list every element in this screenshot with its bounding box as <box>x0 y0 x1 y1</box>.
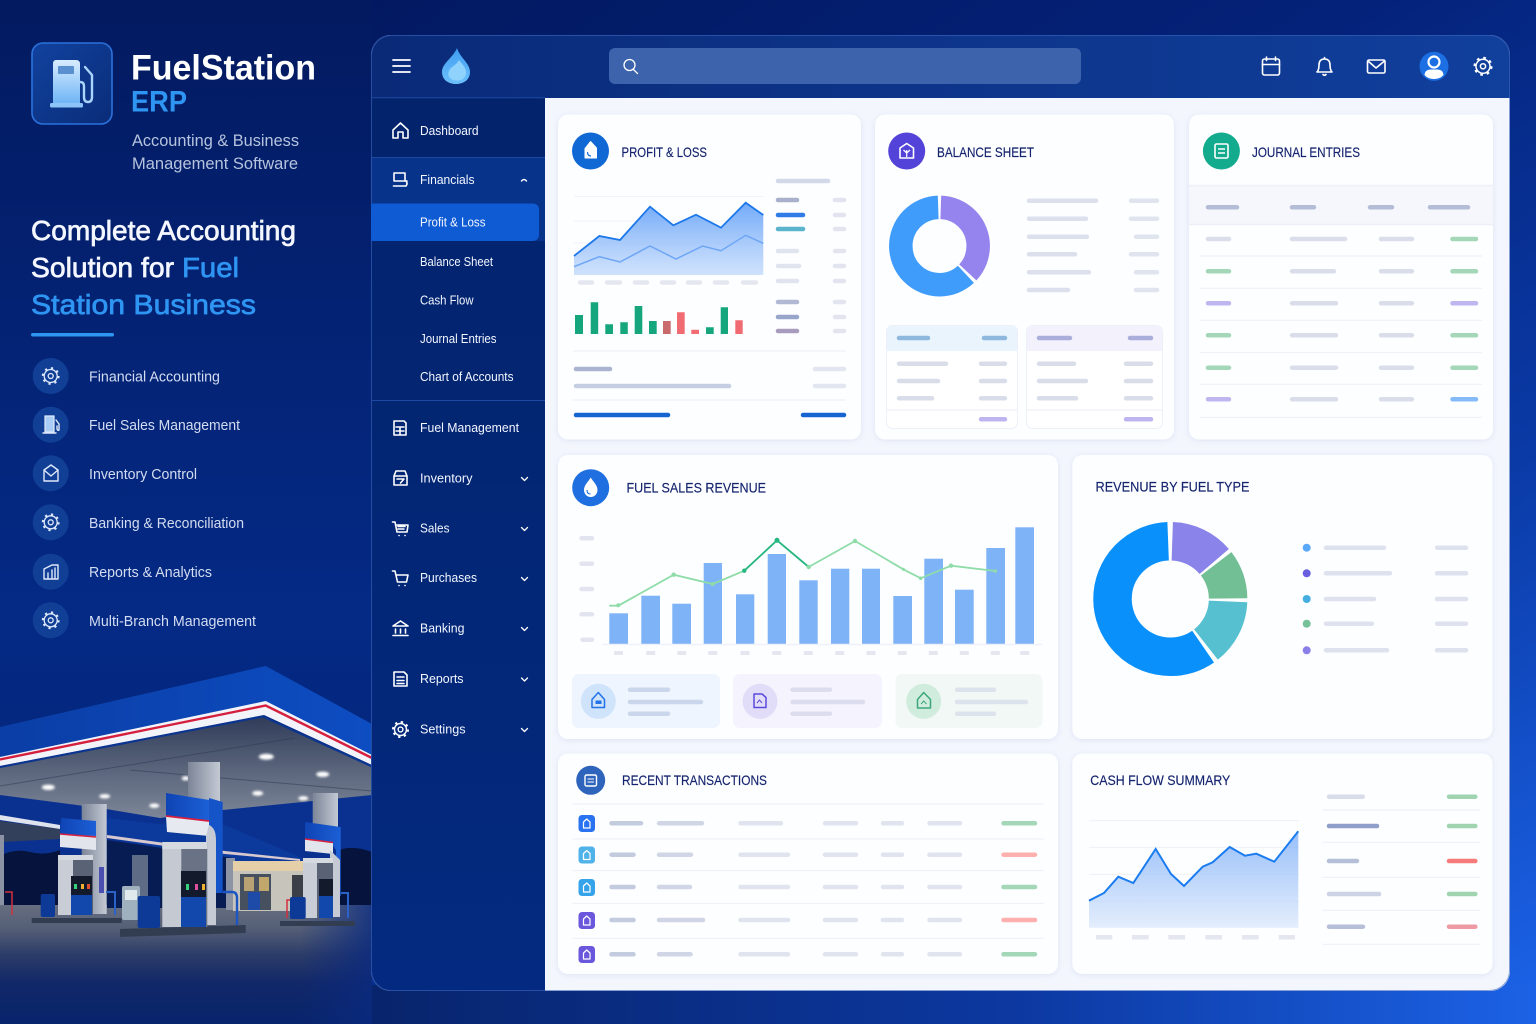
financials expanded band <box>371 157 545 241</box>
feature: financial accounting: Financial Accounting <box>89 370 220 386</box>
main canopy roof <box>0 666 372 758</box>
sidebar background <box>371 98 545 991</box>
nav sub: balance sheet: Balance Sheet <box>420 255 493 269</box>
headline: Station Business <box>31 289 256 320</box>
icon: mail <box>1368 60 1385 73</box>
bar chart: profit <box>575 302 743 334</box>
stat card 2 <box>733 674 882 728</box>
headline underline <box>31 333 114 336</box>
pump: left <box>5 804 115 917</box>
nav: banking <box>393 621 528 636</box>
pump: center <box>138 762 237 928</box>
y axis labels <box>582 538 592 640</box>
icon: profit drop <box>572 132 609 170</box>
icon: balance <box>888 132 925 170</box>
icon: fuel pump logo <box>32 43 112 124</box>
panel: revenue by fuel type <box>1072 455 1492 739</box>
icon: menu <box>393 60 410 72</box>
headline: Complete Accounting <box>31 215 296 246</box>
top bar background <box>371 35 1510 98</box>
brand name: FuelStation <box>131 48 316 88</box>
feature: inventory: Inventory Control <box>89 467 197 483</box>
feature: banking <box>33 504 244 540</box>
feature: fuel sales: Fuel Sales Management <box>89 418 240 434</box>
stat card 3 <box>896 674 1042 728</box>
nav sub: cash flow: Cash Flow <box>420 294 474 308</box>
nav: banking: Banking <box>420 622 465 636</box>
bottom background strip <box>372 985 1536 1024</box>
nav: settings <box>393 722 528 737</box>
feature: reports: Reports & Analytics <box>89 565 212 581</box>
stat card 1 <box>572 674 720 728</box>
canopy fascia stripe <box>0 701 372 767</box>
brand suffix: ERP <box>131 86 187 118</box>
nav: settings: Settings <box>420 722 466 736</box>
headline: Fuel <box>182 252 239 283</box>
window frame <box>371 35 1510 991</box>
area chart <box>574 196 763 282</box>
table rows <box>1200 239 1482 417</box>
sidebar navigation <box>371 123 539 737</box>
heading: BALANCE SHEET <box>937 144 1034 160</box>
donut chart <box>1112 541 1228 657</box>
nav sub: journal entries: Journal Entries <box>420 332 496 346</box>
row icons <box>578 815 595 963</box>
panel: balance sheet <box>875 114 1174 440</box>
nav: dashboard: Dashboard <box>420 124 479 138</box>
brand logo block <box>32 43 316 173</box>
legend <box>1303 544 1466 654</box>
nav: financials: Financials <box>420 173 474 187</box>
nav: purchases: Purchases <box>420 571 477 585</box>
nav active: profit and loss <box>371 204 539 241</box>
nav: sales <box>392 521 528 536</box>
canopy lights <box>42 754 329 808</box>
feature: reports <box>33 554 212 590</box>
nav: inventory: Inventory <box>420 472 473 486</box>
icon: transactions <box>576 766 605 795</box>
mini table: liabilities <box>1026 326 1162 428</box>
nav sub: chart of accounts: Chart of Accounts <box>420 370 514 384</box>
canopy ceiling <box>0 716 372 818</box>
area chart <box>1089 821 1299 937</box>
x axis labels <box>614 651 1029 655</box>
icon: fuel drop <box>572 469 609 506</box>
panel: cash flow summary <box>1072 754 1492 974</box>
feature: fuel sales <box>33 407 240 443</box>
icon: journal <box>1203 132 1240 170</box>
nav: dashboard <box>393 123 479 138</box>
panel: fuel sales revenue <box>558 455 1058 739</box>
feature: financial accounting <box>33 358 220 394</box>
table rows <box>572 804 1044 954</box>
feature list <box>33 358 256 638</box>
panel: journal entries <box>1189 114 1493 440</box>
nav: inventory <box>394 471 528 486</box>
nav active: profit and loss: Profit & Loss <box>420 216 486 230</box>
nav: reports: Reports <box>420 672 464 686</box>
heading: RECENT TRANSACTIONS <box>622 772 767 788</box>
heading: JOURNAL ENTRIES <box>1252 144 1360 160</box>
feature: multi-branch <box>33 602 256 638</box>
trend line <box>609 538 997 607</box>
feature: multi-branch: Multi-Branch Management <box>89 614 256 630</box>
donut chart <box>901 207 978 285</box>
feature: banking: Banking & Reconciliation <box>89 516 244 532</box>
panel: recent transactions <box>558 754 1058 974</box>
totals <box>573 351 846 415</box>
icon: water drop logo <box>442 48 470 84</box>
nav: financials <box>394 173 526 187</box>
panel: profit and loss <box>558 114 861 440</box>
top bar <box>393 48 1491 84</box>
headline <box>31 215 296 320</box>
icon: calendar <box>1262 57 1280 75</box>
second canopy and shop <box>0 815 307 920</box>
islands <box>32 918 355 937</box>
summary list <box>778 181 844 331</box>
feature: inventory <box>33 455 197 491</box>
heading: CASH FLOW SUMMARY <box>1090 772 1231 788</box>
nav: reports <box>394 672 528 686</box>
search bar <box>609 48 1081 84</box>
app window <box>371 35 1510 991</box>
gas station illustration <box>0 666 372 1024</box>
table header <box>1189 186 1493 224</box>
heading: REVENUE BY FUEL TYPE <box>1096 478 1250 494</box>
balance list <box>1029 201 1157 290</box>
nav: purchases <box>392 571 528 586</box>
mini table: assets <box>886 326 1018 428</box>
content area <box>1490 972 1510 991</box>
summary list <box>1323 797 1480 944</box>
icon: settings gear <box>1475 58 1491 75</box>
tagline <box>132 131 299 173</box>
nav: fuel management: Fuel Management <box>420 421 520 435</box>
tagline: Management Software <box>132 154 298 173</box>
icon: bell <box>1317 58 1332 75</box>
bar chart: revenue <box>602 527 1042 644</box>
heading: PROFIT & LOSS <box>622 144 707 160</box>
left promo background <box>0 0 372 1024</box>
pump: right <box>287 793 348 919</box>
headline: Solution for <box>31 252 174 283</box>
icon: user avatar <box>1420 52 1448 81</box>
tagline: Accounting & Business <box>132 131 299 150</box>
nav: sales: Sales <box>420 521 450 535</box>
heading: FUEL SALES REVENUE <box>626 479 766 495</box>
